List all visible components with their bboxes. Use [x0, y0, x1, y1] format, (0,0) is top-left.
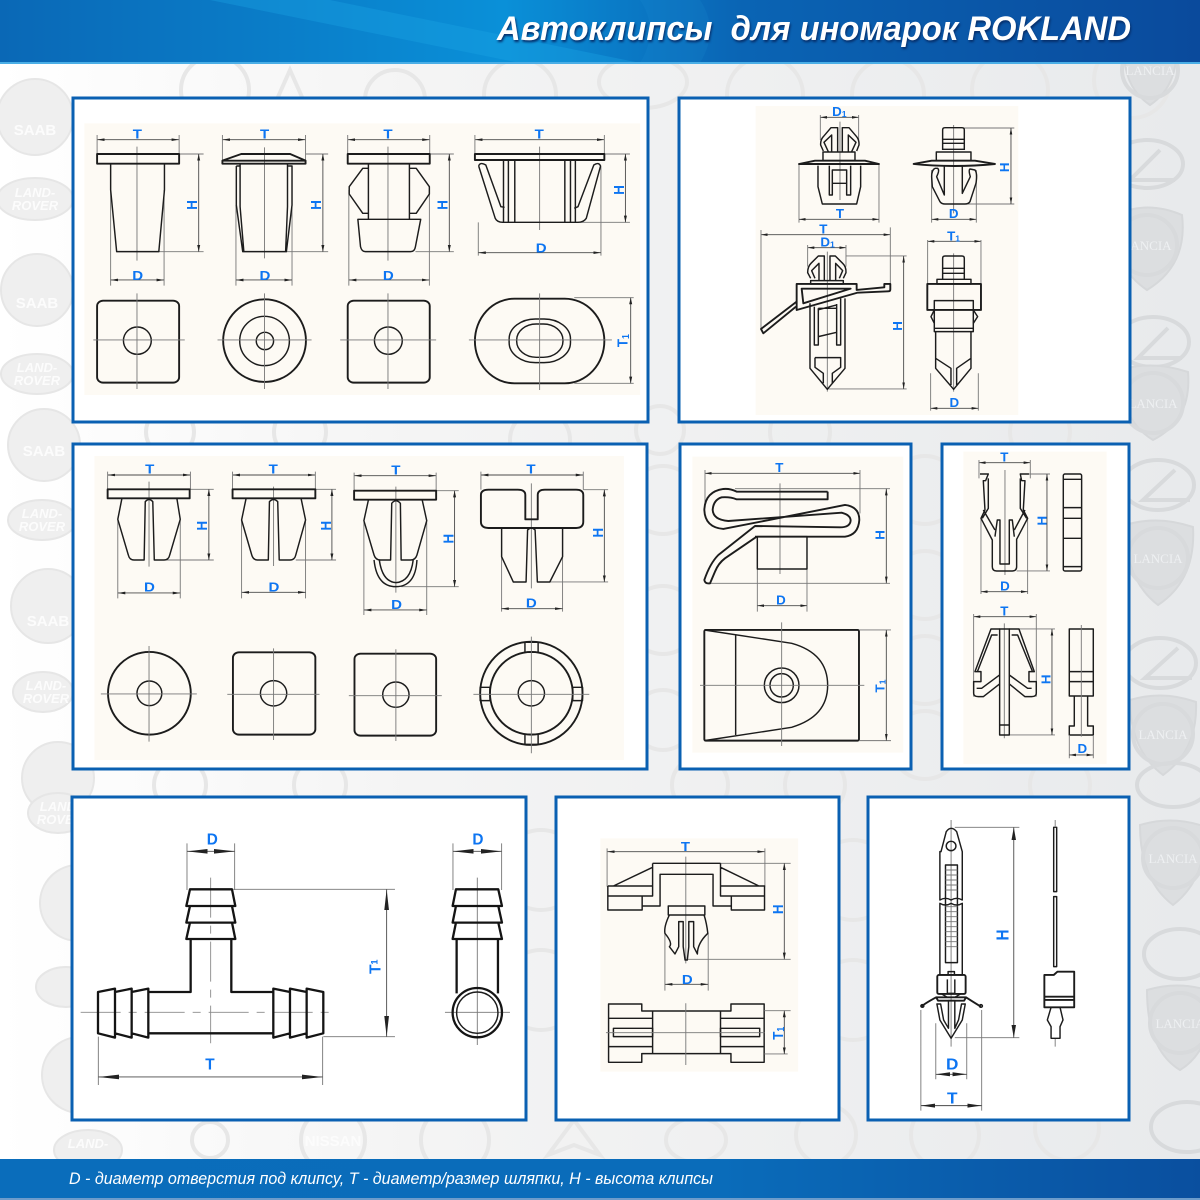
background car logos watermark: LANCIA — [1125, 63, 1175, 78]
background car logos watermark: LAND- — [15, 185, 55, 200]
bracket side view — [607, 839, 791, 991]
bracket top view — [606, 1003, 791, 1065]
clip 4 side view: T — [526, 462, 536, 477]
T connector front view: 1 — [370, 959, 380, 965]
background car logos watermark: ROVER — [12, 198, 59, 213]
panel: T hose connector — [72, 797, 526, 1120]
background car logos watermark: ROVER — [19, 519, 66, 534]
clip 2 side view: H — [308, 200, 325, 210]
panel: spring nut clip — [680, 444, 911, 769]
background car logos watermark: LAND- — [22, 506, 62, 521]
background car logos watermark: SAAB — [16, 295, 58, 312]
background car logos watermark: LANCIA — [1128, 396, 1178, 411]
fastener 2 side — [1069, 625, 1093, 758]
fastener 2 front: T — [1000, 604, 1008, 619]
strap tie front view: D — [946, 1056, 959, 1073]
clip 4 side view: D — [526, 596, 537, 611]
clip 2 side view: D — [259, 269, 270, 284]
clip 1 side view — [108, 462, 214, 598]
top view ring with tabs — [473, 637, 589, 753]
T connector front view: D — [207, 831, 218, 848]
fastener 1 front: T — [1000, 449, 1008, 464]
clip 2 side view — [233, 462, 336, 598]
background car logos watermark: LAND- — [26, 678, 66, 693]
T connector front view: T — [205, 1056, 215, 1073]
clip 3 side view: H — [441, 534, 458, 543]
background car logos watermark: NISSAN — [305, 1133, 361, 1150]
clip A side — [914, 125, 1014, 223]
spring clip side view — [704, 460, 890, 612]
clip A front: D — [832, 104, 842, 119]
clip 3 side view: D — [383, 269, 394, 284]
clip A front: T — [836, 206, 844, 221]
fastener 2 front: H — [1038, 674, 1053, 684]
clip B front — [761, 222, 907, 392]
clip 2 side view — [222, 127, 328, 286]
clip B side: 1 — [955, 234, 960, 244]
spring clip side view: D — [776, 593, 786, 608]
background car logos watermark: LAND- — [68, 1136, 108, 1151]
fastener 1 front — [979, 449, 1050, 594]
clip B front: H — [890, 321, 905, 331]
top view square 2 — [340, 293, 436, 389]
background car logos watermark: SAAB — [23, 443, 65, 460]
T connector side view — [445, 831, 510, 1045]
panel: strap tie clip — [868, 797, 1129, 1120]
clip 4 side view: T — [535, 127, 544, 142]
top view oval — [469, 293, 634, 390]
fastener 1 side — [1063, 474, 1082, 571]
top view oval: 1 — [620, 334, 631, 339]
clip B front: 1 — [830, 240, 835, 250]
clip 1 side view: T — [145, 462, 155, 477]
clip 4 side view: D — [536, 241, 547, 256]
spring clip top view: 1 — [878, 679, 888, 684]
footer bar — [0, 1159, 1200, 1200]
title: Автоклипсы для иномарок ROKLAND — [496, 10, 1131, 48]
panel: fir tree fasteners — [942, 444, 1129, 769]
clip 4 side view: H — [590, 528, 607, 537]
fastener 1 front: H — [1034, 516, 1049, 525]
bracket top view: T — [769, 1032, 786, 1040]
clip 3 side view — [354, 463, 459, 615]
background car logos watermark: ROVER — [23, 691, 70, 706]
clip B side: D — [949, 395, 959, 410]
clip A side: D — [949, 206, 959, 221]
bracket top view: 1 — [775, 1027, 786, 1032]
clip 3 side view: H — [435, 200, 452, 210]
clip 4 side view — [475, 127, 630, 256]
background car logos watermark: LAND- — [17, 360, 57, 375]
background car logos watermark: LANCIA — [1122, 238, 1172, 253]
T connector side view: D — [472, 831, 483, 848]
spring clip top view — [700, 622, 891, 746]
clip 2 side view: H — [318, 521, 335, 530]
clip B front: T — [819, 222, 827, 237]
clip B side: T — [947, 229, 955, 244]
clip 3 side view: T — [391, 463, 401, 478]
fastener 1 front: D — [1000, 578, 1010, 593]
background car logos watermark: ROVER — [14, 373, 61, 388]
bracket side view: H — [769, 905, 786, 914]
clip B front: D — [820, 235, 830, 250]
background car logos watermark: LANCIA — [1138, 727, 1188, 742]
spring clip top view: T — [873, 684, 888, 692]
panel: split leg clips — [73, 444, 647, 769]
spring clip side view: T — [775, 460, 783, 475]
top view round — [101, 646, 197, 742]
background car logos watermark: SAAB — [27, 613, 69, 630]
strap tie front view: T — [947, 1090, 958, 1107]
clip 3 side view — [348, 127, 454, 286]
clip 1 side view: H — [194, 521, 211, 530]
panel: wide bracket clip — [556, 797, 839, 1120]
top view square — [227, 648, 319, 740]
spring clip side view: H — [873, 530, 888, 540]
strap tie front view: H — [994, 929, 1013, 941]
background car logos watermark: ROVER — [37, 812, 84, 827]
clip 4 side view — [481, 462, 608, 612]
T connector front view: T — [367, 965, 384, 974]
bracket side view: D — [682, 972, 693, 987]
fastener 2 front — [974, 604, 1055, 738]
clip 3 side view: T — [383, 127, 393, 142]
top view oval: T — [615, 339, 632, 347]
clip 1 side view: D — [132, 269, 143, 284]
top view round — [218, 293, 312, 389]
T connector front view — [81, 831, 395, 1085]
panel: screw rivet clips — [679, 98, 1130, 422]
clip 4 side view: H — [611, 185, 628, 195]
clip 1 side view — [97, 127, 204, 286]
clip 2 side view: T — [260, 127, 269, 142]
clip 2 side view: D — [269, 580, 279, 595]
clip A side: H — [997, 163, 1012, 172]
clip 3 side view: D — [391, 598, 402, 613]
strap tie front view — [921, 820, 1019, 1111]
clip A front: 1 — [842, 109, 847, 119]
clip 2 side view: T — [269, 462, 278, 477]
background car logos watermark: LANCIA — [1133, 551, 1183, 566]
legend text: D - диаметр отверстия под клипсу, T - диаметр/размер шляпки, H - высота клипсы — [69, 1169, 713, 1188]
top view square — [93, 293, 185, 389]
strap tie side view — [1044, 820, 1074, 1047]
background car logos watermark: LAND- — [40, 799, 80, 814]
clip 1 side view: H — [184, 200, 201, 210]
clip 1 side view: D — [144, 580, 155, 595]
clip 1 side view: T — [133, 127, 142, 142]
clip A front — [799, 104, 879, 223]
panel: four push clips with top views — [73, 98, 648, 422]
background car logos watermark: LANCIA — [1148, 851, 1198, 866]
background car logos watermark: SAAB — [14, 122, 56, 139]
fastener 2 side: D — [1077, 741, 1087, 756]
bracket side view: T — [681, 839, 690, 854]
clip B side — [927, 229, 981, 411]
top view square 2 — [349, 649, 442, 741]
header banner — [0, 0, 1200, 64]
